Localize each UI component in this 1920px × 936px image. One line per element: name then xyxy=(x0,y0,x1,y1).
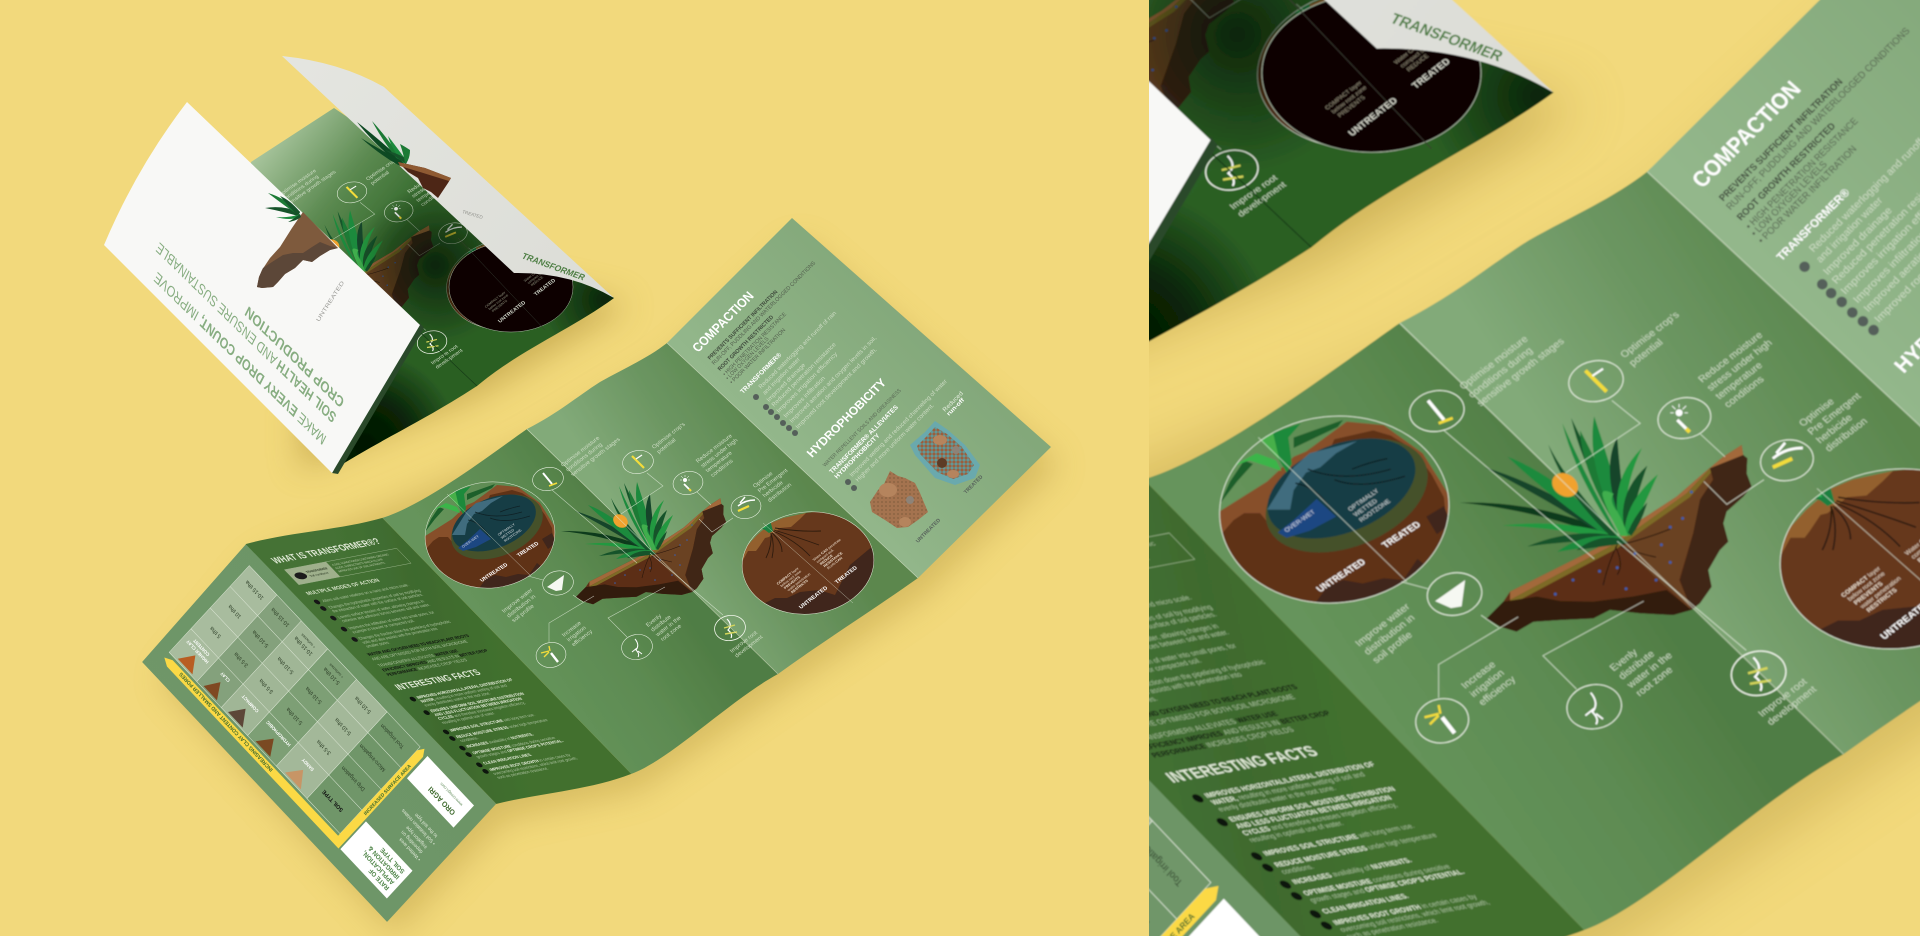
graphic labels: stress under high xyxy=(700,438,739,469)
compaction text block: and irrigation water xyxy=(762,357,802,396)
graphic labels: Optimise crop's xyxy=(651,422,687,450)
circle: roots untreated and treated: COMPACT layer xyxy=(776,567,800,586)
graphic artwork: circles, plant, icons and labels xyxy=(420,422,880,670)
white box: ORO AGRI logo: www.oroagri.com xyxy=(439,781,463,808)
circle: roots untreated and treated: RESTRICTS xyxy=(790,579,810,594)
list: interesting facts: IMPROVES ROOT GROWTH in certain cases by xyxy=(488,752,572,772)
rates values: 5-10 t/ha xyxy=(285,705,304,726)
white box: rate of application: SOIL TYPE xyxy=(379,845,406,875)
unfolded brochure xyxy=(142,200,1075,922)
graphic labels: sensitive growth stages xyxy=(570,437,622,478)
circle: roots untreated and treated xyxy=(737,505,880,621)
graphic labels: Optimise moisture xyxy=(560,436,601,468)
list: modes of action: smaller pores. xyxy=(364,640,391,649)
graphic labels: distribute xyxy=(650,615,673,633)
rates values: 5-10 t/ha xyxy=(334,716,353,736)
black shaded circle xyxy=(449,238,573,332)
blob labels xyxy=(915,391,985,544)
rates values: 10-15 t/ha xyxy=(270,605,291,628)
list: modes of action xyxy=(312,581,460,650)
list: modes of action: the interaction of water with the surface of soil particles. xyxy=(331,592,424,613)
soil type row labels: SOIL TYPE xyxy=(321,788,345,813)
circle: moisture untreated and treated: ROOTZONE xyxy=(503,528,523,543)
black shaded circle: TREATED xyxy=(533,278,557,297)
circle outline xyxy=(737,505,879,621)
plant with orange fruit xyxy=(561,482,673,559)
graphic labels: herbicide xyxy=(762,480,785,499)
heading: multiple modes of action: MULTIPLE MODES OF ACTION xyxy=(305,578,382,597)
graphic labels: distribution xyxy=(767,482,793,504)
circle: roots untreated and treated: REDUCE xyxy=(819,554,834,566)
left view: whole mockup scene xyxy=(104,56,1056,932)
rates values: 10-15 t/ha xyxy=(293,634,314,657)
list: interesting facts: such as penetration resistance. xyxy=(495,766,550,780)
white back cover flap: TREATED xyxy=(462,209,484,220)
soil cross-section xyxy=(576,498,726,604)
bullet notes: to the soil type xyxy=(413,811,439,839)
bullet notes: depending on xyxy=(400,829,424,855)
callout: water and oxygen xyxy=(366,633,493,677)
list: modes of action: Lowers surface tension of water, allowing changes in xyxy=(336,599,426,619)
graphic labels: potential xyxy=(656,438,678,455)
list: interesting facts: ENSURES UNIFORM SOIL MOISTURE DISTRIBUTION xyxy=(429,691,525,713)
list: interesting facts: resulting in optimal use of water. xyxy=(440,711,496,725)
graphic labels xyxy=(501,422,800,659)
bullet notes: irrigation type xyxy=(405,824,429,850)
bullet notes: • Wetted area xyxy=(398,836,422,862)
hydrophobicity text block: HYDROPHOBICITY xyxy=(804,376,889,460)
logo box and description: Soil conditioner xyxy=(308,571,331,578)
compaction text block: • LOW OXYGEN LEVELS xyxy=(725,336,771,381)
icon: moisture xyxy=(531,465,565,493)
icon: root development xyxy=(713,613,747,643)
cover soil and plant xyxy=(257,193,338,288)
compaction text block xyxy=(689,260,879,436)
white back cover flap: TRANSFORMER xyxy=(520,251,588,282)
fold shading xyxy=(100,80,660,500)
compaction text block: RUN-OFF, PUDDLING AND WATERLOGGED CONDITIONS xyxy=(711,260,817,366)
list: modes of action: Alters soil-water relations on a nano and micro scale. xyxy=(321,583,410,603)
rates values: 3-5 t/ha xyxy=(233,650,250,668)
rates values xyxy=(205,576,409,793)
circle: moisture untreated and treated: OPTIMALLY xyxy=(497,523,516,537)
icon: irrigation efficiency xyxy=(534,640,568,670)
circle: roots untreated and treated: PREVENTS xyxy=(783,575,802,590)
yellow axis arrow xyxy=(161,564,428,848)
arrow label: surface area: INCREASED SURFACE AREA xyxy=(363,763,413,817)
circle: roots untreated and treated: water penetration xyxy=(787,572,811,592)
list: modes of action: example in heavier or compacted soil. xyxy=(351,618,416,634)
soil type row labels: COMPACT xyxy=(241,694,260,714)
logo box and description xyxy=(284,548,411,585)
compaction text block: Improved root development and growth. xyxy=(795,347,879,430)
blob labels: Reduced xyxy=(942,391,965,413)
leader lines xyxy=(528,473,733,642)
rates table grid xyxy=(169,566,420,834)
panel: table of application rates xyxy=(142,544,507,922)
logo box and description: TRANSFORMER xyxy=(305,567,329,574)
list: interesting facts: REDUCE MOISTURE STRESS under high temperature xyxy=(455,718,550,739)
graphic labels: Optimise xyxy=(752,471,774,489)
black shaded circle: below root zone xyxy=(487,293,509,311)
list: interesting facts xyxy=(408,677,592,782)
graphic labels: efficiency xyxy=(571,629,594,648)
panel: what is Transformer xyxy=(234,500,648,815)
list: modes of action: Changes the fraction down the pipelining of hydrophobic xyxy=(357,619,453,641)
bullet notes: • Soil limitation relates xyxy=(400,807,437,846)
list: interesting facts: AND LESS FLUCTUATION BETWEEN IRRIGATION xyxy=(433,696,523,717)
black shaded circle: UNTREATED xyxy=(497,300,528,324)
graphic labels: conditions during xyxy=(565,442,604,473)
cover headline: MAKE EVERY DROP COUNT, IMPROVE xyxy=(151,269,328,449)
circle: moisture untreated and treated: TREATED xyxy=(516,541,541,558)
black shaded circle: PREVENTS xyxy=(491,299,509,313)
graphic labels: development xyxy=(734,635,765,659)
rates values: 5-10 t/ha xyxy=(353,694,373,715)
rates values: Drip irrigation xyxy=(341,764,367,792)
icon: temperature xyxy=(671,469,705,497)
list: interesting facts: IMPROVES HORIZONTAL/LATERAL DISTRIBUTION OF xyxy=(415,677,514,700)
compaction text block: Improved aeration and oxygen levels in soil, xyxy=(789,335,879,424)
white box: rate of application: RATE OF xyxy=(368,867,391,891)
soil blob: untreated xyxy=(870,471,928,528)
rates values: 5-10 t/ha xyxy=(251,628,270,648)
compaction text block: • POOR WATER INFILTRATION xyxy=(729,328,787,385)
cover headline: SOIL HEALTH AND ENSURE SUSTAINABLE xyxy=(154,239,338,427)
rates values: Tool irrigation xyxy=(380,722,406,750)
soil type row labels: CONTENT xyxy=(192,638,211,657)
circle outline xyxy=(420,475,560,595)
compaction text block: Reduced waterlogging and runoff of rain xyxy=(758,311,838,390)
graphic labels: Increase xyxy=(561,621,583,638)
callout: water and oxygen: TRANSFORMER® ALLEVIATES WATER USE xyxy=(376,648,459,668)
blob labels: run-off xyxy=(946,398,966,417)
graphic labels: Improve root xyxy=(729,630,759,654)
soil type row labels xyxy=(183,635,351,813)
soil blob: treated with water film xyxy=(910,421,980,485)
graphic labels: soil profile xyxy=(511,604,536,624)
list: interesting facts: IMPROVES SOIL STRUCTURE with long term use. xyxy=(448,712,536,733)
graphic labels: irrigation xyxy=(566,625,588,643)
white back cover flap xyxy=(282,56,614,298)
list: interesting facts: evenly distributes water in the root zone. xyxy=(423,691,492,707)
graphic labels: water in the xyxy=(654,615,683,639)
hydrophobicity text block: Improved wetting and reduced channeling of water xyxy=(849,379,949,478)
circle: moisture untreated and treated xyxy=(420,475,560,600)
blob labels: UNTREATED xyxy=(915,518,942,544)
flap soil xyxy=(398,162,451,198)
arrow label: clay content: INCREASING CLAY CONTENT AND SMALLER PORES xyxy=(178,670,275,773)
circle: roots untreated and treated: compact soil, xyxy=(815,548,835,564)
interior artwork reused at folded position xyxy=(134,155,585,380)
folded interior xyxy=(100,80,660,500)
white box: ORO AGRI logo xyxy=(407,756,474,828)
list: interesting facts: overcoming soil restrictions, which limit root growth, xyxy=(492,756,579,776)
rates values: 10-15 t/ha xyxy=(244,578,265,601)
compaction text block: Improves irrigation efficiency xyxy=(776,352,839,414)
list: modes of action: soils and also assists with the penetration into xyxy=(361,626,439,645)
circle: roots untreated and treated: Water CAN penetrate xyxy=(812,538,842,562)
logo box and description: A SOIL CONDITIONER CONTAINING ORGANIC xyxy=(331,553,391,567)
panel: left graphic panel xyxy=(365,413,795,791)
white box: rate of application: IRRIGATION & xyxy=(367,844,401,880)
white front cover xyxy=(104,102,424,474)
compaction text block: TRANSFORMER® xyxy=(738,351,783,395)
circle: roots untreated and treated: TREATED xyxy=(834,565,859,585)
white front cover: UNTREATED xyxy=(316,280,346,323)
callout: water and oxygen: AND ARE OPTIMISED FOR BOTH SOIL MICROBIOME xyxy=(370,639,469,661)
rates values: 10 t/ha xyxy=(227,602,243,619)
black shaded circle: compact soil, xyxy=(526,270,545,285)
heading: interesting facts: INTERESTING FACTS xyxy=(392,668,484,693)
soil type row labels: CLAY xyxy=(219,671,231,683)
circle: roots untreated and treated: below root zone xyxy=(779,570,802,588)
compaction text block: • HIGH PENETRATION RESISTANCE xyxy=(722,312,788,377)
graphic labels: temperature xyxy=(705,451,734,474)
graphic labels: distribution in xyxy=(506,594,537,619)
icon: herbicide xyxy=(729,493,763,521)
list: interesting facts: CYCLES and therefore increases irrigation efficiency, xyxy=(436,700,527,721)
circle: roots untreated and treated: RESISTANCE xyxy=(823,551,844,568)
soil type row labels: SANDY xyxy=(301,757,315,772)
rates values: 3-5 t/ha xyxy=(258,676,275,695)
list: interesting facts: WATER, resulting in more uniform wetting of soil and xyxy=(419,683,509,704)
rates values: 5 t/ha xyxy=(209,624,223,639)
hydrophobicity text block: WATER REPELLENT SOILS AND GREASINESS xyxy=(822,388,903,468)
black shaded circle: REDUCE xyxy=(530,275,545,287)
white box: rate of application: APPLICATION, xyxy=(361,849,396,886)
list: interesting facts: INCREASES availability of NUTRIENTS. xyxy=(465,732,535,749)
circle: moisture untreated and treated: OVER-WET xyxy=(461,534,481,549)
fold lines xyxy=(527,343,918,674)
compaction text block: PREVENTS SUFFICIENT INFILTRATION xyxy=(707,289,779,361)
hydrophobicity text block: HYDROPHOBICITY xyxy=(833,432,882,480)
circle: moisture untreated and treated: UNTREATED xyxy=(479,563,509,583)
rates values: 5-10 t/ha xyxy=(304,684,323,705)
soil type wedges xyxy=(178,655,304,790)
right view: enlarged close-up of the same scene xyxy=(468,0,1920,936)
callout: water and oxygen: EFFICIENCY IMPROVES AND RESULTS IN BETTER CROP xyxy=(381,648,489,672)
compaction text block: COMPACTION xyxy=(689,289,757,355)
cover headline: CROP PRODUCTION xyxy=(242,303,346,412)
rates values: + surfactant xyxy=(329,662,344,679)
list: modes of action: cohesive and adhesive forces between soil and water. xyxy=(340,602,431,623)
rates values: 5-10 t/ha xyxy=(276,654,295,675)
compaction text block: ROOT GROWTH RESTRICTED xyxy=(717,315,775,372)
graphic labels: Evenly xyxy=(645,614,663,628)
white box: rate of application xyxy=(340,821,413,899)
white box: ORO AGRI logo: ORO AGRI xyxy=(426,785,457,817)
graphic labels: root zone xyxy=(660,624,683,643)
list: modes of action: Improves the infiltration of water into small pores, for xyxy=(347,610,436,630)
logo box and description: IMPROVED USE OF SOIL NUTRIENTS. xyxy=(337,561,387,573)
list: interesting facts: OPTIMISE MOISTURE conditions during sensitive xyxy=(471,735,557,755)
compaction text block: Improved drainage xyxy=(766,362,808,403)
circle: moisture untreated and treated: WETTED xyxy=(500,528,516,540)
circle: roots untreated and treated: UNTREATED xyxy=(798,585,829,610)
shadow of folded brochure xyxy=(300,280,630,470)
hydrophobicity text block: Higher and more uniform water content. xyxy=(855,403,936,483)
heading: what is transformer: WHAT IS TRANSFORMER®? xyxy=(269,537,384,566)
list: interesting facts: conditions. xyxy=(458,736,480,743)
circle: roots untreated and treated: Roots CAN xyxy=(826,556,843,570)
icon: water distribution xyxy=(541,568,575,598)
hydrophobicity text block xyxy=(804,376,949,491)
rates values: 5-10 t/ha xyxy=(322,665,341,685)
folded brochure xyxy=(100,56,660,500)
panel: middle graphic panel xyxy=(510,327,935,690)
icon: root zone xyxy=(620,632,654,662)
bullet notes xyxy=(400,809,438,860)
rates values: 3-5 t/ha xyxy=(315,737,333,756)
graphic labels: Pre Emergent xyxy=(757,468,790,494)
list: interesting facts: growth stages and OPTIMISE CROP'S POTENTIAL. xyxy=(475,739,565,759)
compaction text block: Improves infiltration xyxy=(783,376,827,419)
list: modes of action: Changes the hydrophobic properties of soil by modifying xyxy=(327,588,422,610)
rates values: Micro-irrigation xyxy=(359,742,387,772)
graphic labels: conditions xyxy=(710,459,735,479)
black shaded circle: COMPACT layer xyxy=(484,291,506,309)
list: interesting facts: CLEAN IRRIGATION LINES. xyxy=(482,752,533,765)
logo box and description: ACIDS, SURFACTANTS WHICH ALLOW xyxy=(334,558,384,570)
icon: crop potential xyxy=(621,448,655,476)
black shaded circle: Water CAN xyxy=(523,270,539,283)
shadow of unfolded brochure xyxy=(160,240,1060,935)
graphic labels: Reduce moisture xyxy=(695,434,734,464)
hydrophobicity text block: TRANSFORMER® ALLEVIATES xyxy=(827,404,900,475)
flap plant xyxy=(357,121,410,166)
soil type row labels: HYDROPHOBIC xyxy=(265,719,292,748)
blob labels: TREATED xyxy=(963,474,985,495)
soil type row labels: HIGHER CLAY xyxy=(185,639,210,665)
interior fold crease xyxy=(421,333,477,386)
graphic labels: Improve water xyxy=(501,588,534,614)
callout: water and oxygen: PERFORMANCE INCREASES CROP YIELDS xyxy=(385,658,468,677)
panel: compaction and hydrophobicity xyxy=(650,200,1075,594)
rates values: + surfactant xyxy=(301,632,316,649)
compaction text block: Reduced penetration resistance xyxy=(771,342,838,408)
callout: water and oxygen: WATER AND OXYGEN NEED TO REACH PLANT ROOTS xyxy=(366,633,471,657)
